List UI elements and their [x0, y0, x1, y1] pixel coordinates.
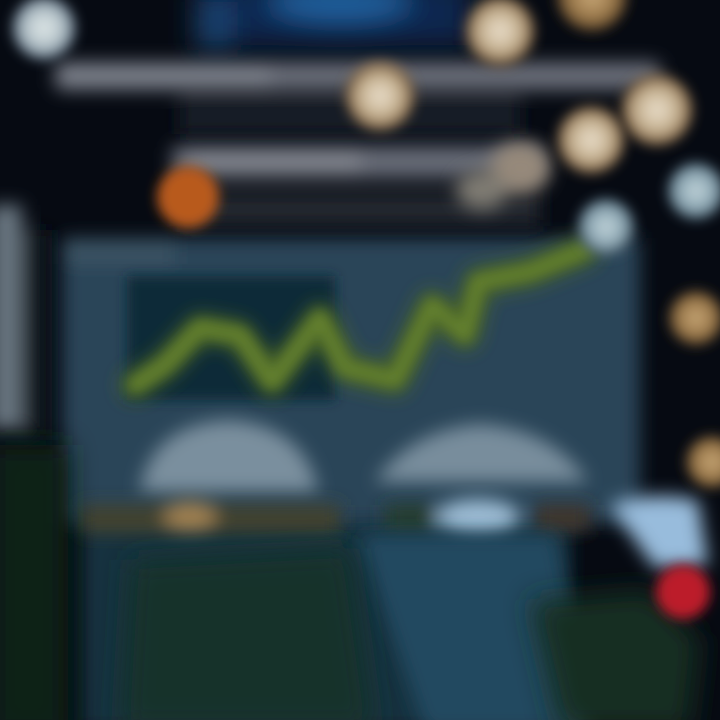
orange circle	[157, 166, 219, 228]
red circle	[656, 565, 710, 619]
orb: right tan	[668, 290, 720, 346]
chart: dark plot area	[127, 276, 335, 400]
left pillar	[0, 205, 52, 440]
orb: lower right tan	[685, 435, 720, 489]
heading bar: lower title	[172, 146, 542, 226]
middle strip	[80, 499, 590, 535]
orb: top left	[12, 0, 76, 60]
light blue shape	[610, 496, 708, 568]
orb: top centre	[465, 0, 535, 66]
orb: chart end point	[577, 198, 635, 256]
right dome	[375, 424, 588, 482]
heading bar: upper title	[55, 62, 660, 134]
orb: heading centre	[345, 61, 415, 131]
lower blue wedge	[358, 535, 590, 720]
top blue glow	[195, 0, 470, 50]
orb: top right	[556, 0, 628, 32]
lower left foliage	[120, 548, 375, 720]
orb cluster	[456, 142, 550, 210]
orb: heading right	[621, 74, 693, 146]
chart: rising green line	[135, 250, 585, 385]
orb: middle right	[557, 106, 625, 174]
lower right foliage	[530, 590, 700, 720]
orb: far right blue	[667, 162, 720, 220]
panel: main slate board	[62, 238, 640, 720]
left green column	[0, 445, 68, 720]
left dome	[140, 420, 318, 492]
